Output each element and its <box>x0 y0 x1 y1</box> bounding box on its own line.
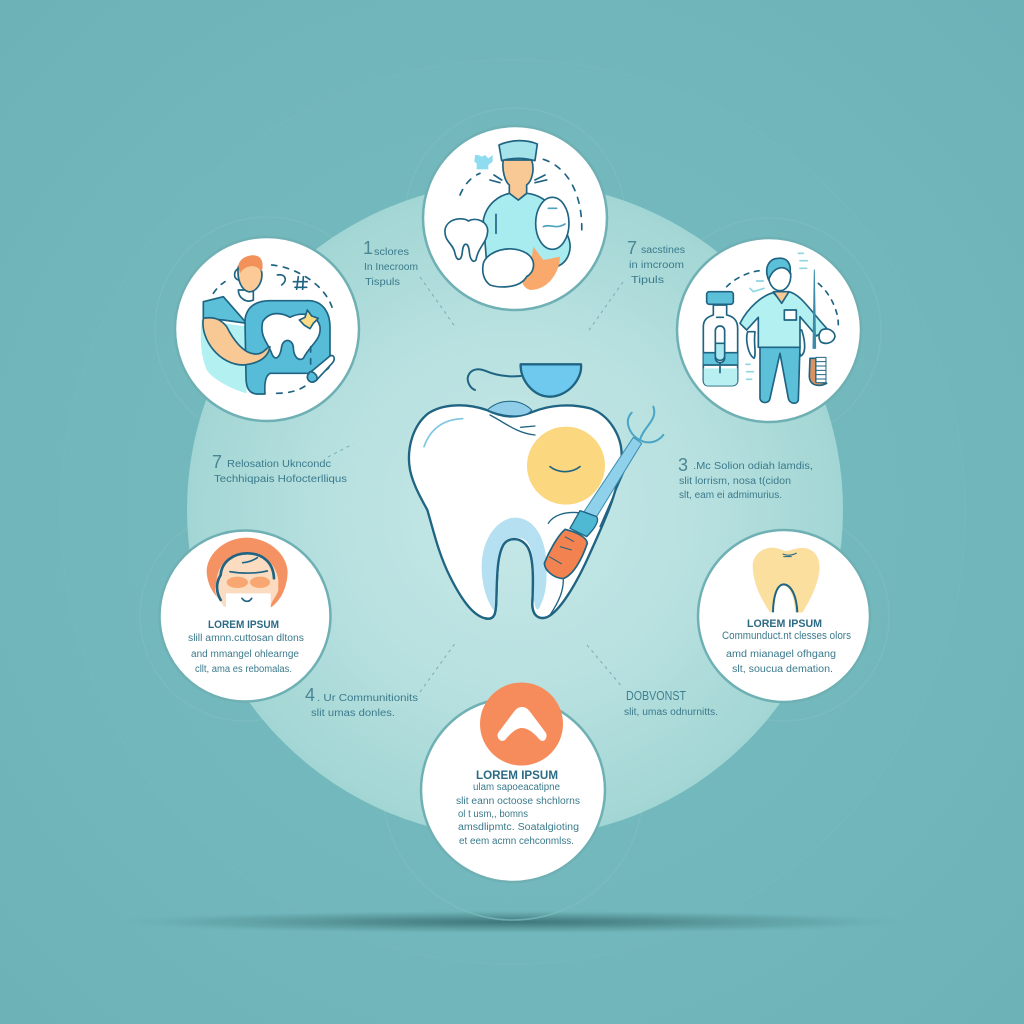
panel: lower-right circle <box>698 530 870 702</box>
body text: and mmangel ohlearnge <box>191 649 299 660</box>
label: lorem ipsum: LOREM IPSUM <box>476 768 558 782</box>
text block: item 4 <box>305 685 418 719</box>
smile <box>550 467 580 472</box>
panel: top circle <box>423 126 607 310</box>
text block: item 3 <box>678 455 813 501</box>
tooth highlight <box>424 419 463 447</box>
text block: item 7 top <box>627 238 685 286</box>
body text: slit eann octoose shchlorns <box>456 796 580 807</box>
probe collar <box>570 511 598 537</box>
panel: bottom circle <box>421 682 605 882</box>
body text: ulam sapoeacatipne <box>473 782 560 793</box>
label: lorem ipsum: LOREM IPSUM <box>208 619 279 631</box>
text block: item 7 top: sacstines <box>641 245 685 256</box>
body text: cllt, ama es rebomalas. <box>195 664 292 675</box>
probe claw <box>628 407 663 442</box>
body text: amd mianagel ofhgang <box>726 649 836 660</box>
yellow circle <box>527 427 605 505</box>
text block: item 7 top: 7 <box>627 238 637 258</box>
text block: dobvonst <box>624 688 718 718</box>
text block: item 3: slt, eam ei admimurius. <box>679 490 782 501</box>
body text: ol t usm,, bomns <box>458 809 528 820</box>
text block: item 4: 4 <box>305 685 315 705</box>
text block: item 7 top: in imcroom <box>629 260 684 271</box>
panel: upper-left circle <box>175 237 359 421</box>
panel: upper-right circle <box>677 238 861 422</box>
central disc <box>187 182 843 838</box>
text block: item 7 left: Techhiqpais Hofocterlliqus <box>214 474 347 485</box>
body text: slill amnn.cuttosan dltons <box>188 633 304 644</box>
probe handle <box>544 529 587 579</box>
body text: Communduct.nt clesses olors <box>722 630 851 642</box>
text block: item 7 left: 7 <box>212 452 222 472</box>
ground shadow <box>87 910 937 934</box>
tooth body <box>409 405 622 619</box>
icon: patient holding tooth <box>201 255 334 394</box>
text block: item 1: In Inecroom <box>364 262 418 273</box>
text block: item 3: .Mc Solion odiah lamdis, <box>693 461 813 472</box>
body text <box>456 782 580 847</box>
text block: item 7 left <box>212 452 347 485</box>
root canal <box>482 518 547 612</box>
icon: dentist with vial <box>703 253 838 403</box>
icon: relaxed face <box>207 538 288 608</box>
text block: item 4: slit umas donles. <box>311 708 395 719</box>
halo rings <box>140 108 889 920</box>
text block: item 3: 3 <box>678 455 688 475</box>
text block: item 3: slit lorrism, nosa t(cidon <box>679 476 791 487</box>
cup <box>521 364 581 397</box>
text block: item 1 <box>363 238 418 288</box>
text block: item 1: Tispuls <box>365 277 400 288</box>
central tooth illustration <box>409 364 663 619</box>
body text: slt, soucua demation. <box>732 664 833 675</box>
text block: item 4: . Ur Communitionits <box>317 693 418 704</box>
text block: item 1: sclores <box>374 247 409 258</box>
icon: orange chevron badge <box>480 682 563 766</box>
text block: item 1: 1 <box>363 238 373 258</box>
dashed connectors <box>328 277 623 692</box>
icon: dentist with tooth <box>445 141 582 290</box>
text block: item 7 top: Tipuls <box>631 275 664 286</box>
body text <box>188 633 304 675</box>
text block: dobvonst: DOBVONST <box>626 688 686 703</box>
hook wire <box>468 369 521 390</box>
body text <box>722 630 851 675</box>
panel: lower-left circle <box>160 530 330 702</box>
leaf <box>487 401 532 416</box>
probe shaft <box>584 437 642 517</box>
text block: item 7 left: Relosation Ukncondc <box>227 459 331 470</box>
body text: et eem acmn cehconmlss. <box>459 836 574 847</box>
probe inner line <box>548 472 624 615</box>
body text: amsdlipmtc. Soatalgioting <box>458 822 579 833</box>
text block: dobvonst: slit, umas odnurnitts. <box>624 707 718 718</box>
icon: yellow tooth <box>753 548 820 612</box>
label: lorem ipsum: LOREM IPSUM <box>747 618 822 630</box>
